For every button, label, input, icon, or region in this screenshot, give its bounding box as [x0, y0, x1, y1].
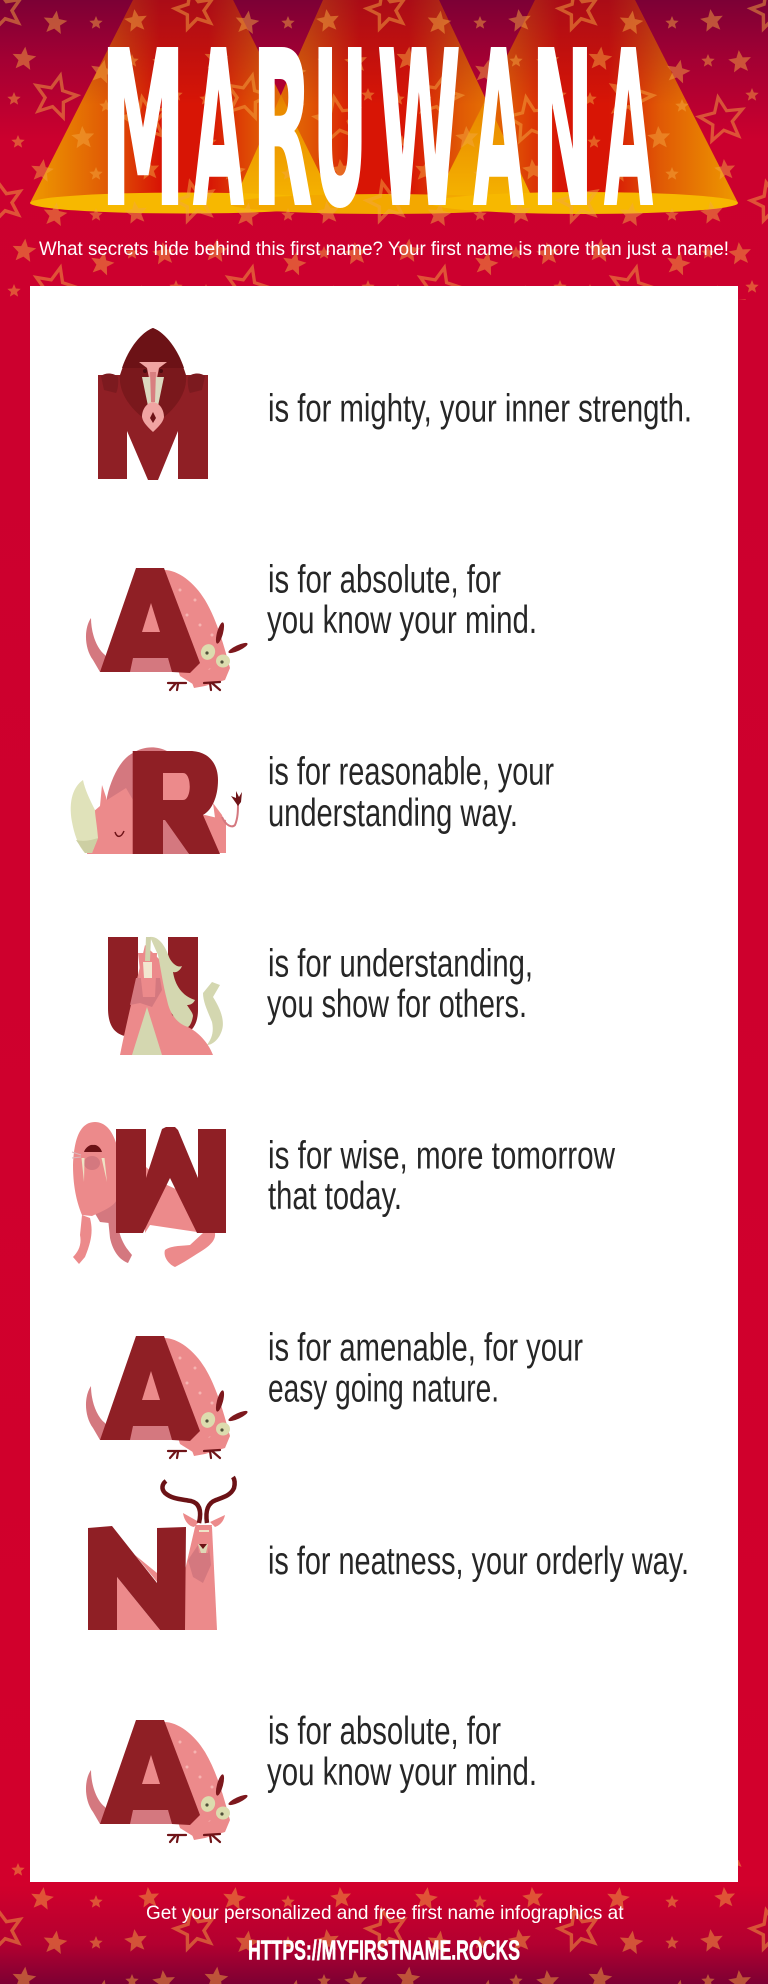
text: R line: is for reasonable, your: [268, 750, 554, 793]
title: M: [101, 8, 185, 254]
text: A second line: is for amenable, for your: [268, 1327, 583, 1370]
text: W line: is for wise, more tomorrow: [268, 1135, 616, 1178]
icon: letter A armadillo second: [86, 1336, 249, 1458]
title: A: [473, 8, 524, 254]
title: N: [532, 8, 593, 254]
footer text: Get your personalized and free first name infographics at: [146, 1902, 624, 1924]
text: A: [604, 8, 653, 254]
text: A third line: you know your mind.: [267, 1751, 537, 1794]
text: A third line: is for absolute, for: [268, 1710, 501, 1753]
text: W line: [268, 1135, 616, 1218]
title: U: [313, 8, 367, 254]
title: A: [193, 8, 244, 254]
text: R line: understanding way.: [268, 792, 518, 835]
title: W: [377, 8, 460, 254]
panel: white content: [30, 286, 738, 1882]
text: A line: is for absolute, for: [268, 559, 501, 602]
icon: letter A armadillo: [86, 568, 249, 690]
text: A line: [267, 559, 537, 642]
text: A line: you know your mind.: [267, 599, 537, 642]
text: A second line: [268, 1327, 583, 1411]
text: W line: that today.: [268, 1175, 402, 1218]
star pattern top: [0, 0, 768, 300]
icon: letter M baboon: [98, 328, 208, 480]
subtitle: What secrets hide behind this first name? Your first name is more than just a name!: [39, 238, 729, 260]
title: R: [252, 8, 312, 254]
text: U line: you show for others.: [267, 983, 527, 1026]
icon: letter N gazelle: [88, 1477, 235, 1630]
text: A third line: [267, 1710, 537, 1794]
icon: letter W walrus: [72, 1122, 226, 1267]
icon: letter U horse: [108, 937, 223, 1055]
icon: letter A armadillo third: [86, 1720, 249, 1842]
spotlights: [30, 0, 738, 214]
text: U line: is for understanding,: [268, 943, 533, 986]
footer url: HTTPS://MYFIRSTNAME.ROCKS: [248, 1934, 520, 1966]
text: R line: [268, 750, 554, 835]
star pattern bottom: [0, 1860, 768, 1984]
text: A second line: easy going nature.: [268, 1368, 499, 1411]
icon: letter R rhino: [71, 747, 242, 854]
text: U line: [267, 943, 533, 1026]
